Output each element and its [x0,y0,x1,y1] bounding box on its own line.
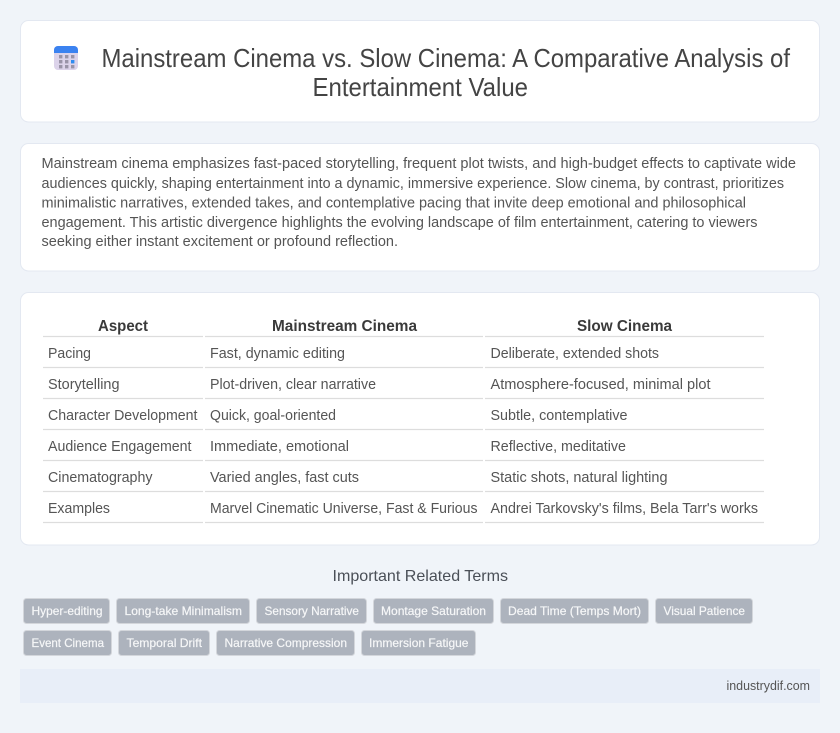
table header row: Slow Cinema [577,318,672,335]
tag list: related terms: Event Cinema [32,636,104,650]
table row: examples: Examples [48,501,110,517]
text block: introduction paragraph: Mainstream cinema emphasizes fast-paced storytelling, frequent plot twists, and high-budget effects to captivate wide [42,155,796,172]
footer [20,669,820,703]
table row: storytelling: Atmosphere-focused, minimal plot [490,377,710,393]
table row: character development [48,408,628,424]
table row: cinematography: Varied angles, fast cuts [210,470,359,486]
table row: character development: Subtle, contemplative [490,408,628,424]
table row: storytelling: Plot-driven, clear narrative [210,377,376,393]
table row: pacing [48,346,659,362]
table header row [98,318,672,335]
table row: cinematography [48,470,668,486]
table row: cinematography: Static shots, natural lighting [490,470,668,486]
text block: introduction paragraph: audiences quickly, shaping entertainment into a dynamic, immersive experience. Slow cinema, by contrast, prioritizes [42,175,784,192]
title: Entertainment Value [312,74,528,102]
tag list: related terms [24,598,752,656]
table row: audience engagement: Reflective, meditative [490,439,626,455]
table row: examples: Marvel Cinematic Universe, Fast & Furious [210,501,478,517]
panel: header [20,20,820,122]
tag list: related terms: Dead Time (Temps Mort) [508,604,641,618]
tag list: related terms: Sensory Narrative [264,604,359,618]
table header row: Aspect [98,318,149,335]
tag list: related terms: Temporal Drift [126,636,203,650]
table row: character development: Quick, goal-oriented [210,408,336,424]
table row: cinematography: Cinematography [48,470,153,486]
title [102,45,791,102]
icon: calendar [54,46,78,70]
table row: examples [48,501,758,517]
title: Mainstream Cinema vs. Slow Cinema: A Comparative Analysis of [102,45,791,73]
table row: examples: Andrei Tarkovsky's films, Bela Tarr's works [490,501,758,517]
table row: character development: Character Development [48,408,198,424]
text block: introduction paragraph: seeking either instant excitement or profound reflection. [42,233,398,250]
table row: pacing: Pacing [48,346,91,362]
text block: introduction paragraph [42,155,796,250]
table row: audience engagement: Audience Engagement [48,439,192,455]
heading: important related terms: Important Related Terms [332,568,508,585]
tag list: related terms: Immersion Fatigue [369,636,469,650]
footer: industrydif.com [726,678,810,693]
panel: introduction [20,144,820,271]
text block: introduction paragraph: minimalistic narratives, extended takes, and contemplative pacing that invite deep emotional and philosophical [42,194,746,212]
tag list: related terms: Narrative Compression [224,636,347,650]
panel: comparison table [20,292,820,545]
table row: audience engagement: Immediate, emotional [210,439,349,455]
table row: pacing: Fast, dynamic editing [210,346,345,362]
tag list: related terms: Hyper-editing [32,604,102,618]
tag list: related terms: Montage Saturation [381,604,486,618]
table row: storytelling [48,377,710,393]
table row: pacing: Deliberate, extended shots [490,346,659,362]
table row: storytelling: Storytelling [48,377,120,393]
tag list: related terms: Long-take Minimalism [124,604,242,618]
table header row: Mainstream Cinema [272,318,417,335]
table row: audience engagement [48,439,626,455]
text block: introduction paragraph: engagement. This artistic divergence highlights the evolving landscape of film entertainment, catering to viewers [42,214,758,231]
tag list: related terms: Visual Patience [664,604,745,618]
